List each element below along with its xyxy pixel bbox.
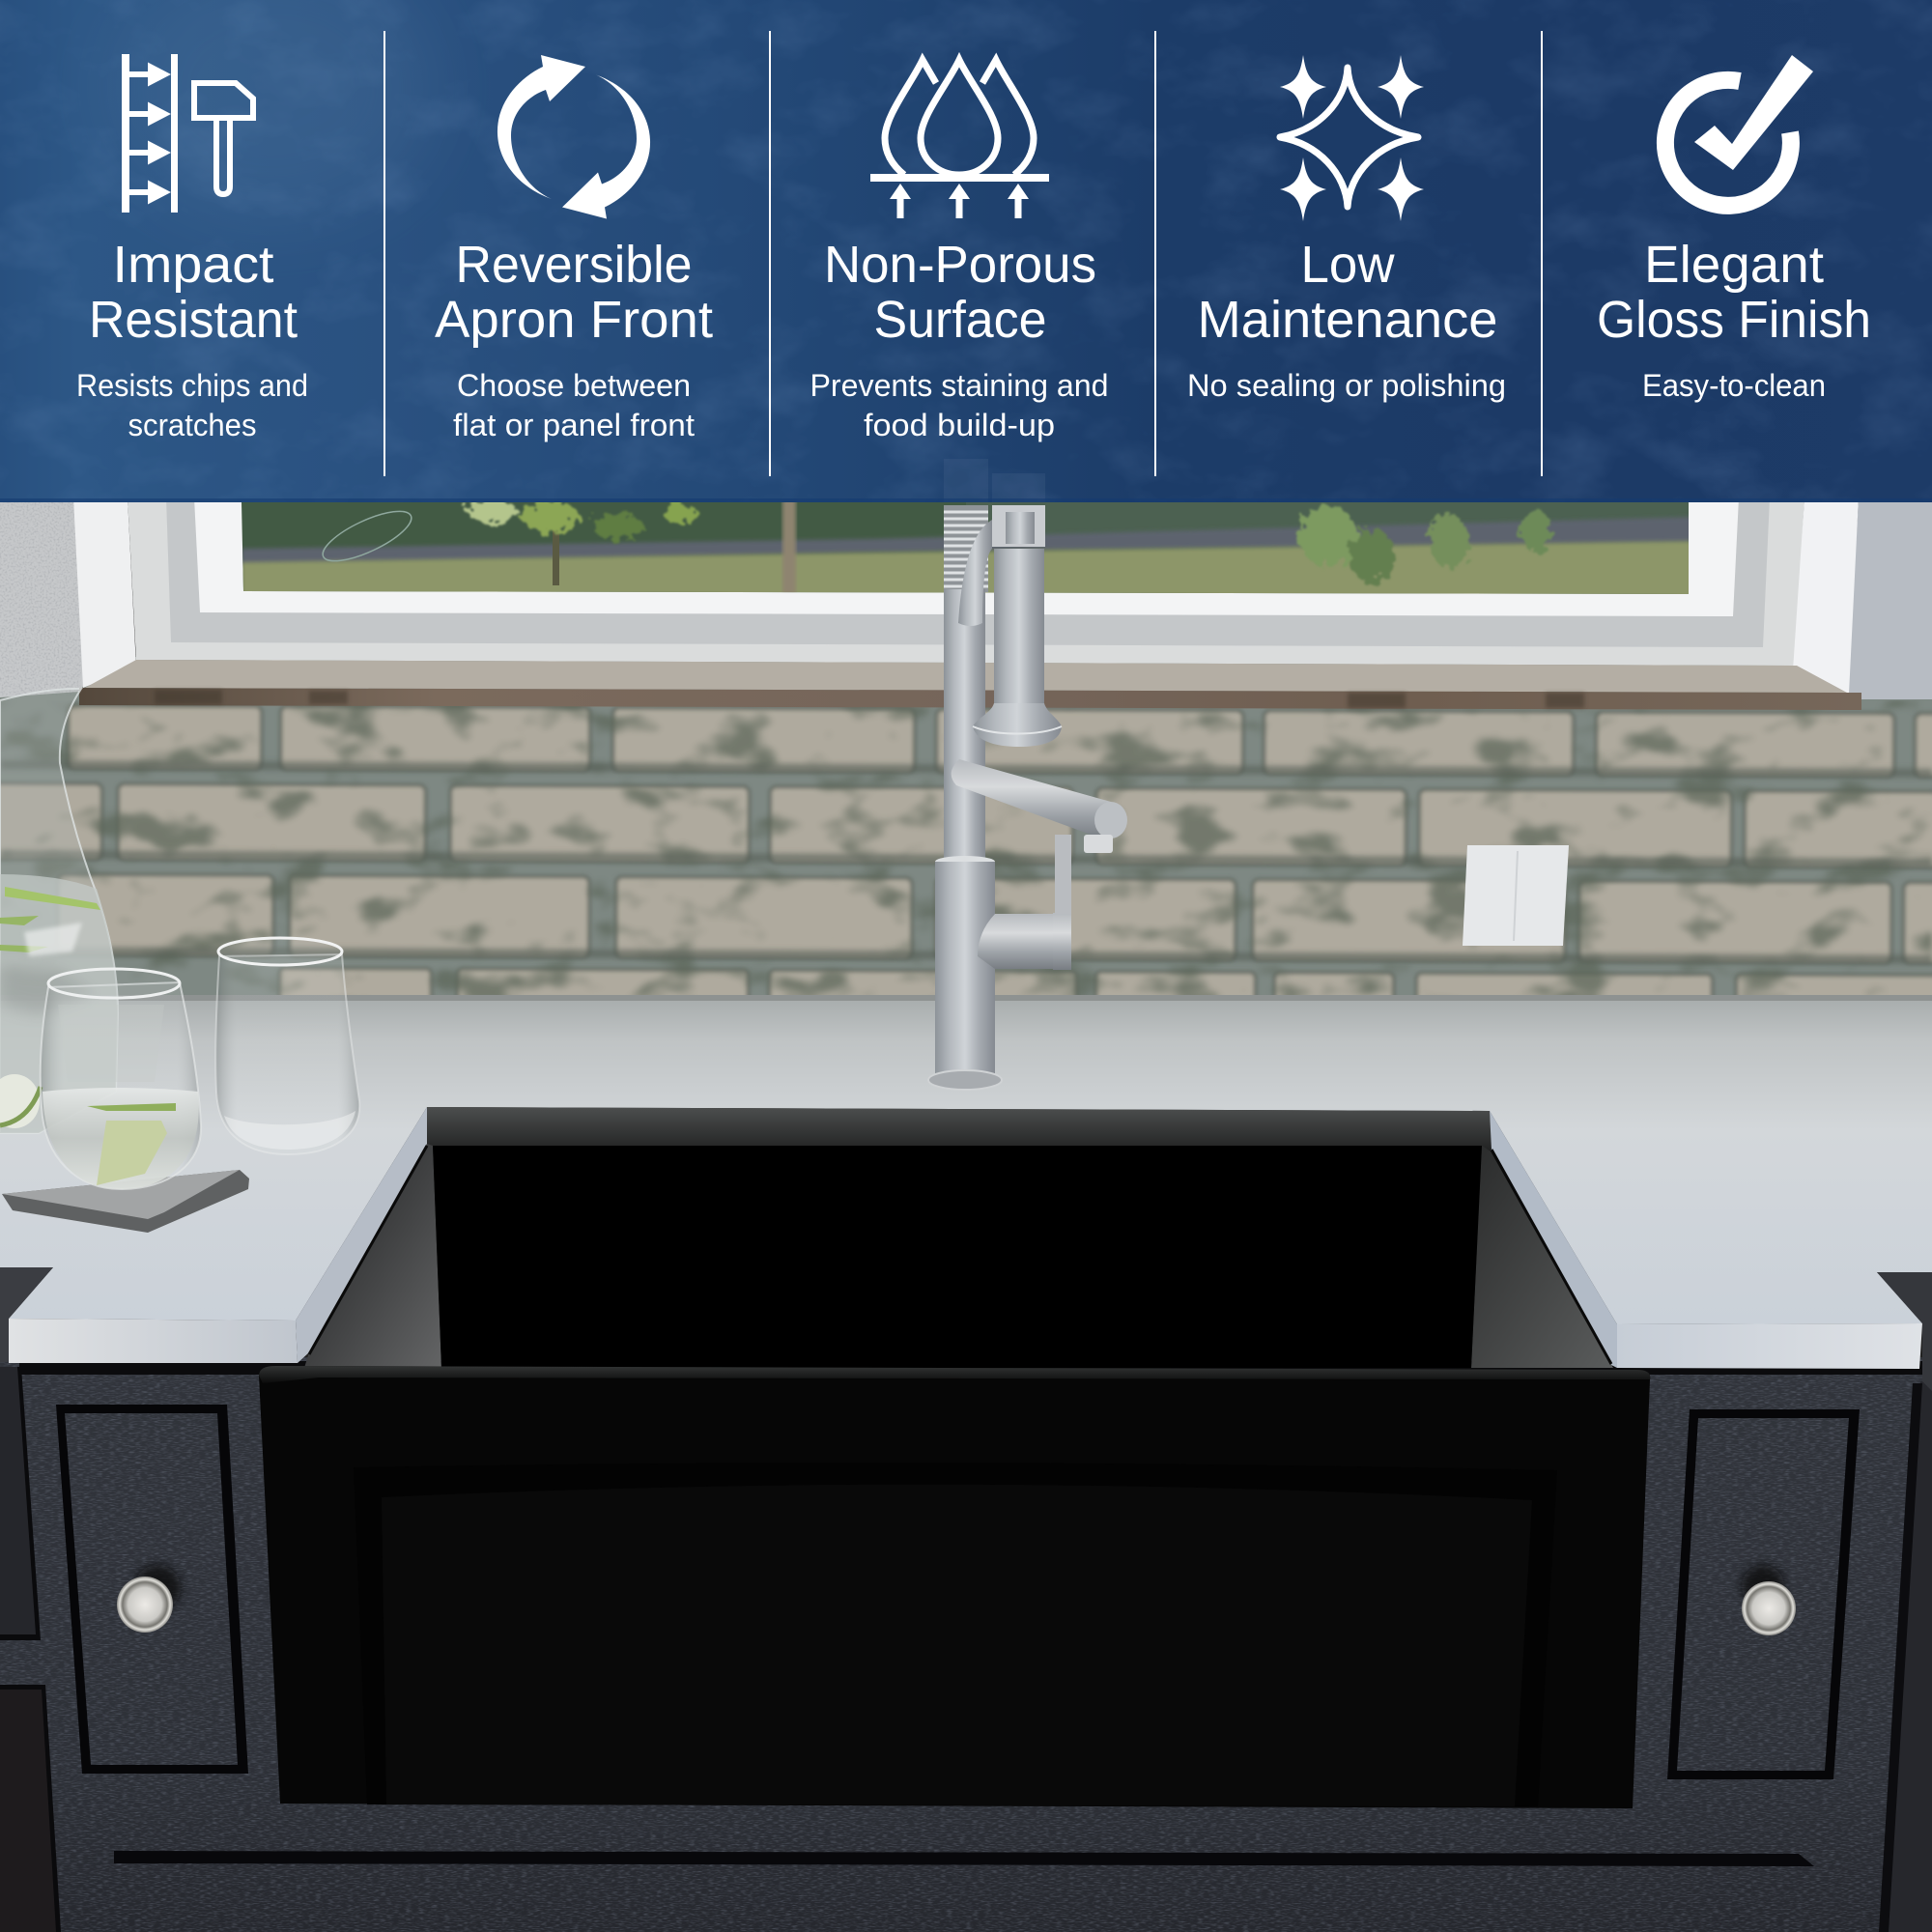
- feature: non-porous surface: [810, 60, 1109, 442]
- counter front left: [9, 1319, 298, 1363]
- feature: impact resistant: [76, 54, 308, 442]
- window frame: [128, 497, 1804, 666]
- description: scratches: [128, 408, 257, 442]
- counter front right: [1617, 1323, 1922, 1369]
- counter side left: [296, 1107, 427, 1363]
- glassware: [0, 689, 359, 1233]
- heading: [1597, 236, 1871, 349]
- left wall: [0, 497, 85, 697]
- heading: [1198, 236, 1497, 349]
- heading: Impact: [112, 236, 274, 294]
- heading: Apron Front: [435, 291, 713, 349]
- heading: [89, 236, 298, 349]
- heading: Surface: [873, 291, 1047, 349]
- heading: Resistant: [89, 291, 298, 349]
- water glass: [41, 969, 201, 1189]
- pull-down sprayer: [973, 505, 1062, 747]
- right wall: [1847, 497, 1932, 699]
- column dividers: [384, 31, 1543, 476]
- description: Prevents staining and: [810, 368, 1109, 403]
- heading: Reversible: [456, 236, 692, 294]
- recessed apron panel: [354, 1463, 1557, 1806]
- right drawer panel: [1667, 1409, 1860, 1779]
- right door edge: [1879, 1381, 1932, 1932]
- feature: low maintenance: [1187, 55, 1506, 403]
- left knob: [117, 1565, 181, 1633]
- description: Easy-to-clean: [1642, 368, 1826, 403]
- heading: Maintenance: [1198, 291, 1497, 349]
- description: flat or panel front: [453, 408, 695, 442]
- counter back corners: [0, 1267, 53, 1362]
- description: No sealing or polishing: [1187, 368, 1506, 403]
- background kitchen scene: [0, 497, 1932, 1009]
- heading: Low: [1300, 236, 1395, 294]
- right knob: [1742, 1565, 1796, 1635]
- left door edge: [0, 1367, 61, 1932]
- counter shadow: [19, 1361, 1922, 1375]
- feature banner: [0, 0, 1932, 502]
- counter side right: [1490, 1111, 1617, 1368]
- heading: Non-Porous: [824, 236, 1096, 294]
- empty glass: [215, 938, 359, 1154]
- icon: reversing arrows: [497, 55, 650, 218]
- icon: sparkles: [1280, 55, 1424, 221]
- light switch: [1463, 845, 1569, 946]
- bottom groove: [114, 1851, 1814, 1866]
- sink apron: [259, 1366, 1650, 1808]
- curved tube: [958, 520, 992, 626]
- handle: [978, 835, 1071, 970]
- napkin: [2, 1170, 249, 1233]
- icon: water drops on surface: [870, 60, 1049, 218]
- sink basin: [304, 1107, 1613, 1368]
- left drawer panel: [56, 1405, 248, 1774]
- countertop: [0, 995, 1932, 1391]
- faucet: [928, 505, 1127, 1090]
- window sill: [85, 660, 1847, 693]
- pole: [944, 589, 985, 865]
- icon: check in circle: [1665, 55, 1813, 206]
- heading: Gloss Finish: [1597, 291, 1871, 349]
- heading: Elegant: [1644, 236, 1824, 294]
- description: Choose between: [457, 368, 691, 403]
- description: Resists chips and: [76, 368, 308, 403]
- description: food build-up: [864, 408, 1055, 442]
- feature: reversible apron front: [435, 55, 713, 442]
- description: [76, 368, 308, 442]
- description: [810, 368, 1109, 442]
- sink: [259, 1107, 1650, 1808]
- icon: wall and hammer: [122, 54, 253, 213]
- window glass view: [242, 502, 1689, 594]
- cabinet: [0, 1357, 1932, 1932]
- pitcher: [0, 689, 118, 1133]
- hose spring: [944, 505, 988, 592]
- faucet body: [928, 856, 1002, 1090]
- description: [453, 368, 695, 442]
- spout: [952, 759, 1127, 853]
- feature: elegant gloss finish: [1597, 55, 1871, 403]
- brick backsplash: [0, 657, 1932, 1009]
- window: [73, 497, 1861, 710]
- heading: [435, 236, 713, 349]
- heading: [824, 236, 1096, 349]
